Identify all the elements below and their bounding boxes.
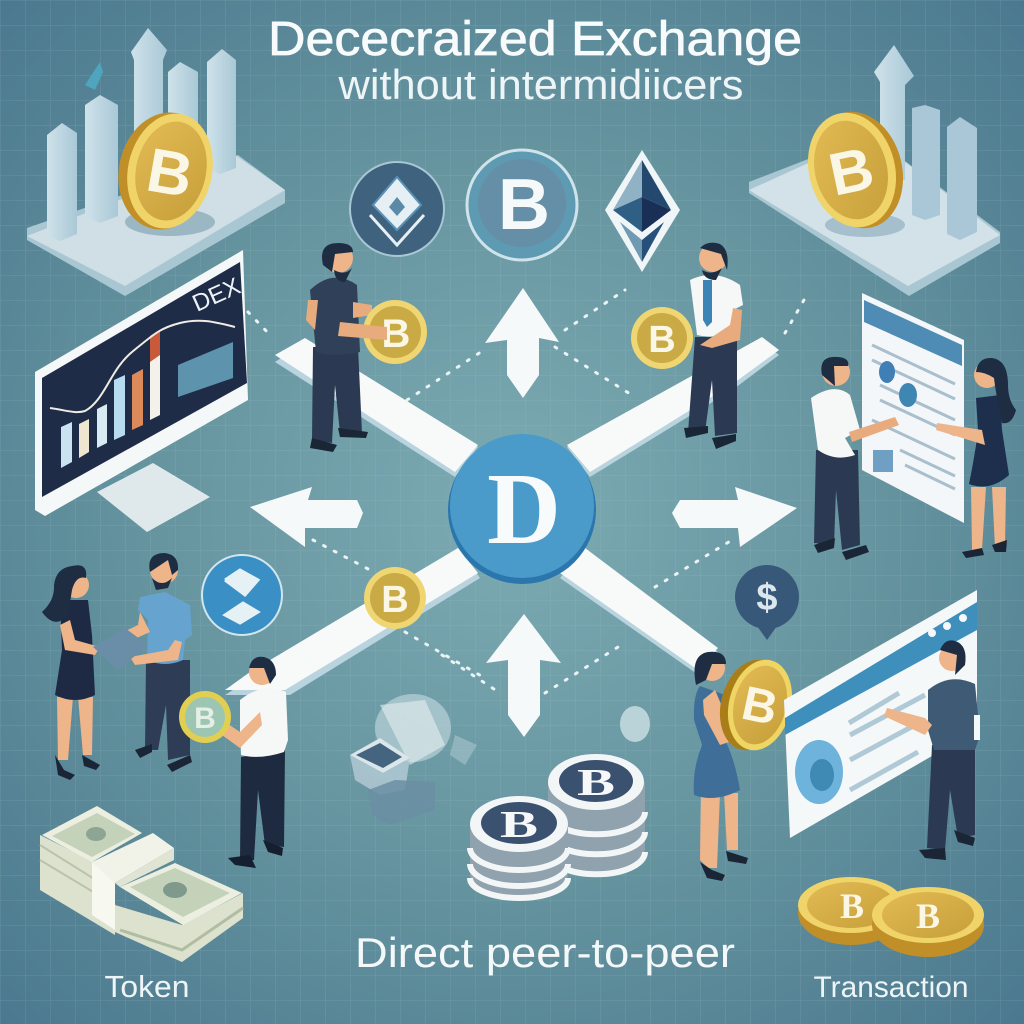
hub: central D circle: D (487, 453, 561, 566)
arrow: left (250, 487, 363, 547)
monitor: DEX chart: DEX (188, 273, 245, 317)
icon: small glass token (620, 706, 650, 742)
arrow: up top (485, 288, 559, 398)
person: man with coin, center left (306, 243, 427, 452)
coin: large gold: B (737, 677, 782, 736)
hub: central D circle (448, 434, 596, 584)
coin: on bottom left road (364, 567, 426, 629)
platform: top right with bars and coin (749, 45, 1000, 296)
title (268, 13, 802, 108)
label: direct peer-to-peer: Direct peer-to-peer (355, 929, 735, 976)
icon: glass shards with device (350, 694, 477, 825)
person: man in dark shirt (884, 640, 980, 860)
gold coins: bottom right: B (916, 896, 940, 936)
person: woman in black dress (42, 565, 100, 780)
stack: right: B (577, 762, 615, 804)
icon: dollar speech bubble (735, 565, 799, 640)
arrow: up bottom (486, 614, 561, 737)
person: man in white shirt with coin, bottom left (179, 657, 288, 868)
coin: green token: B (194, 702, 216, 735)
platform: top right with bars and coin: B (823, 134, 879, 209)
monitor: DEX chart (35, 250, 248, 532)
document panel: right with two people (811, 293, 1016, 560)
icon: token diamond circle (350, 162, 444, 256)
title: Dececraized Exchange (268, 13, 802, 66)
arrow: right (672, 487, 797, 547)
stack: right (548, 754, 645, 874)
coin stacks (470, 754, 645, 898)
platform: top left with bars and coin: B (142, 136, 198, 211)
coin: held by center right man (631, 307, 693, 369)
coin: held by center left man: B (382, 312, 410, 356)
label: token: Token (104, 969, 190, 1004)
platform: top left with bars and coin (27, 28, 285, 296)
people: woman and man exchanging tablet (42, 553, 192, 780)
icon: bitcoin ring (467, 150, 577, 260)
coin: held by center right man: B (648, 319, 676, 361)
person: woman in dark dress (936, 358, 1016, 558)
network: crossing white connector bars (225, 290, 808, 695)
person: man in blue shirt (100, 553, 192, 772)
icon: bitcoin ring: B (498, 165, 550, 245)
coin: green token (179, 691, 231, 743)
coin: on bottom left road: B (381, 579, 409, 621)
label: transaction: Transaction (814, 971, 968, 1004)
person: man with tie, center right (631, 243, 743, 449)
browser panel: bottom right with man (784, 590, 980, 860)
bills: stack of money (40, 806, 243, 962)
person: man in white shirt (811, 357, 899, 560)
title: without intermidiicers (337, 61, 744, 108)
person: woman in blue dress with coin (694, 652, 801, 881)
coin: large gold (711, 653, 801, 757)
icon: dollar speech bubble: $ (756, 577, 778, 619)
icon: blue token circle (202, 555, 282, 635)
tablet (93, 628, 148, 670)
gold coins: bottom right (798, 877, 984, 957)
icon: ethereum diamond (605, 150, 680, 272)
stack: left: B (500, 804, 538, 846)
stack: left (470, 796, 568, 898)
coin: held by center left man (363, 300, 427, 364)
gold coins: bottom right: B (840, 886, 864, 926)
